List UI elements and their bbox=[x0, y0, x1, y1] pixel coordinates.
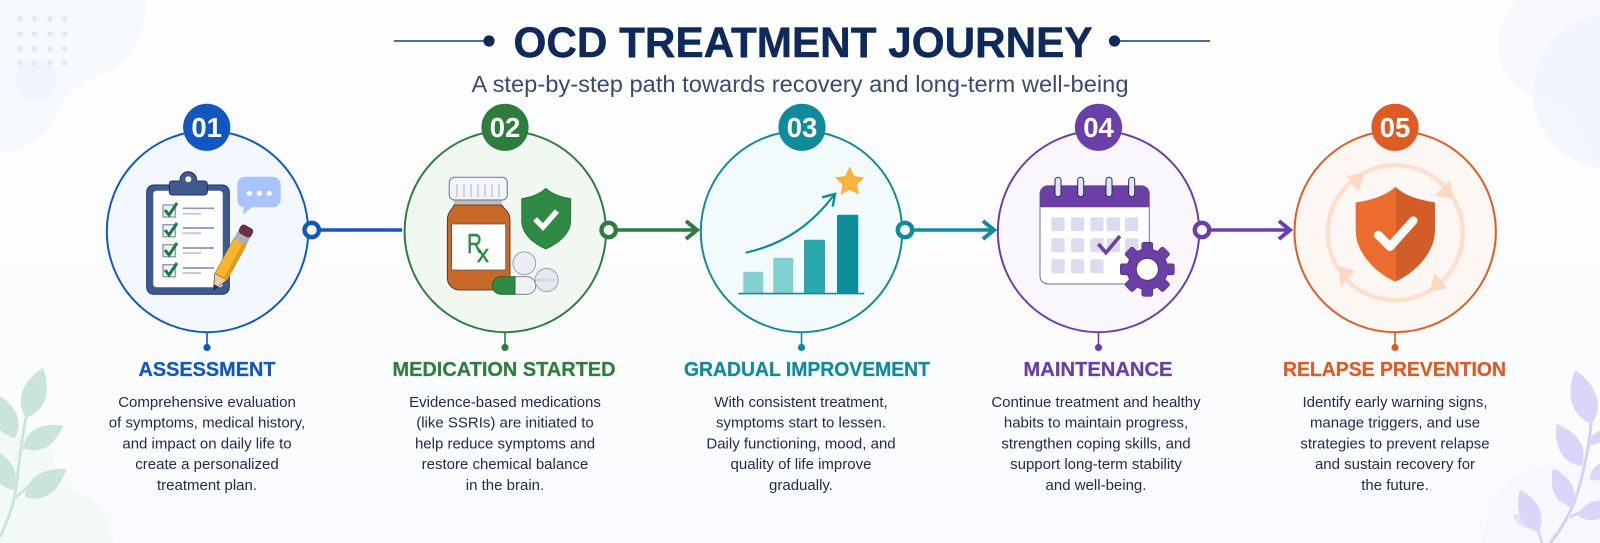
panel: step 02 medication started bbox=[392, 104, 616, 494]
icon: shield with circular arrows bbox=[1328, 165, 1463, 300]
description 02 bbox=[409, 394, 601, 494]
icon: clipboard with pencil and speech bubble bbox=[147, 172, 281, 294]
panel: step 03 gradual improvement bbox=[684, 104, 930, 494]
stem 01 bbox=[203, 332, 211, 351]
description 04: and well-being. bbox=[1046, 477, 1146, 494]
circle 02 bbox=[405, 131, 606, 332]
panel: step 01 assessment bbox=[107, 104, 308, 494]
description 03 bbox=[706, 394, 896, 494]
panel: step 04 maintenance bbox=[991, 104, 1201, 494]
subtitle: A step-by-step path towards recovery and long-term well-being bbox=[472, 71, 1128, 97]
description 05 bbox=[1300, 394, 1490, 494]
description 02: in the brain. bbox=[466, 477, 544, 494]
badge 05 bbox=[1371, 104, 1419, 151]
circle 04 bbox=[998, 131, 1199, 332]
description 03: gradually. bbox=[769, 477, 833, 494]
stem 02 bbox=[501, 332, 509, 351]
title ornament: right rule bbox=[1109, 35, 1210, 47]
description 05: Identify early warning signs, bbox=[1302, 394, 1488, 411]
description 05: and sustain recovery for bbox=[1315, 456, 1475, 473]
description 04: strengthen coping skills, and bbox=[1001, 435, 1191, 452]
heading 01: ASSESSMENT bbox=[138, 359, 276, 381]
icon: calendar with check and gear bbox=[1040, 177, 1174, 296]
description 02: help reduce symptoms and bbox=[415, 435, 595, 452]
description 05: manage triggers, and use bbox=[1310, 415, 1480, 432]
stem 04 bbox=[1095, 332, 1102, 351]
heading 02: MEDICATION STARTED bbox=[392, 359, 616, 381]
description 04 bbox=[991, 394, 1201, 494]
decoration: top-left blob with dots bbox=[0, 0, 145, 154]
connector: 03 to 04 bbox=[898, 221, 994, 239]
badge 02: 02 bbox=[490, 112, 520, 143]
description 04: support long-term stability bbox=[1010, 456, 1182, 473]
badge 04 bbox=[1075, 104, 1122, 151]
description 01: create a personalized bbox=[135, 456, 279, 473]
description 03: With consistent treatment, bbox=[714, 394, 888, 411]
description 03: quality of life improve bbox=[731, 456, 871, 473]
badge 02 bbox=[481, 104, 529, 151]
decoration: top-right blobs bbox=[1498, 0, 1600, 168]
badge 05: 05 bbox=[1380, 112, 1410, 143]
description 02: restore chemical balance bbox=[422, 456, 588, 473]
connector: 02 to 03 bbox=[602, 221, 697, 239]
description 04: habits to maintain progress, bbox=[1004, 415, 1188, 432]
badge 01: 01 bbox=[191, 112, 222, 143]
badge 03: 03 bbox=[787, 112, 817, 143]
stem 03 bbox=[798, 332, 805, 351]
heading 05: RELAPSE PREVENTION bbox=[1283, 359, 1506, 381]
heading 04: MAINTENANCE bbox=[1024, 359, 1172, 381]
description 02: (like SSRIs) are initiated to bbox=[416, 415, 594, 432]
icon: rising bar chart with arrow and star bbox=[738, 168, 864, 294]
description 01: and impact on daily life to bbox=[122, 435, 292, 452]
description 03: Daily functioning, mood, and bbox=[706, 435, 896, 452]
icon: prescription bottle, shield and pills: x bbox=[477, 241, 489, 268]
connector: 01 to 02 bbox=[304, 223, 402, 237]
panel: step 05 relapse prevention bbox=[1283, 104, 1506, 494]
circle 01 bbox=[107, 131, 308, 332]
description 05: the future. bbox=[1361, 477, 1429, 494]
stem 05 bbox=[1391, 332, 1399, 351]
title: OCD TREATMENT JOURNEY bbox=[514, 19, 1092, 67]
description 01 bbox=[109, 394, 305, 494]
circle 05 bbox=[1294, 131, 1496, 332]
badge 03 bbox=[778, 104, 826, 151]
title ornament: left rule bbox=[394, 35, 495, 47]
decoration: bottom-left leaves bbox=[0, 364, 113, 543]
description 03: symptoms start to lessen. bbox=[716, 415, 886, 432]
description 04: Continue treatment and healthy bbox=[991, 394, 1201, 411]
description 02: Evidence-based medications bbox=[409, 394, 601, 411]
circle 03 bbox=[701, 131, 902, 332]
description 01: of symptoms, medical history, bbox=[109, 415, 305, 432]
badge 04: 04 bbox=[1083, 112, 1114, 143]
connector: 04 to 05 bbox=[1195, 221, 1290, 239]
decoration: bottom-right leaves bbox=[1482, 366, 1600, 543]
description 05: strategies to prevent relapse bbox=[1300, 435, 1490, 452]
description 01: treatment plan. bbox=[157, 477, 257, 494]
icon: prescription bottle, shield and pills: R bbox=[467, 228, 482, 259]
icon: prescription bottle, shield and pills bbox=[447, 177, 571, 294]
heading 03: GRADUAL IMPROVEMENT bbox=[684, 359, 930, 381]
description 01: Comprehensive evaluation bbox=[118, 394, 296, 411]
badge 01 bbox=[183, 104, 230, 151]
